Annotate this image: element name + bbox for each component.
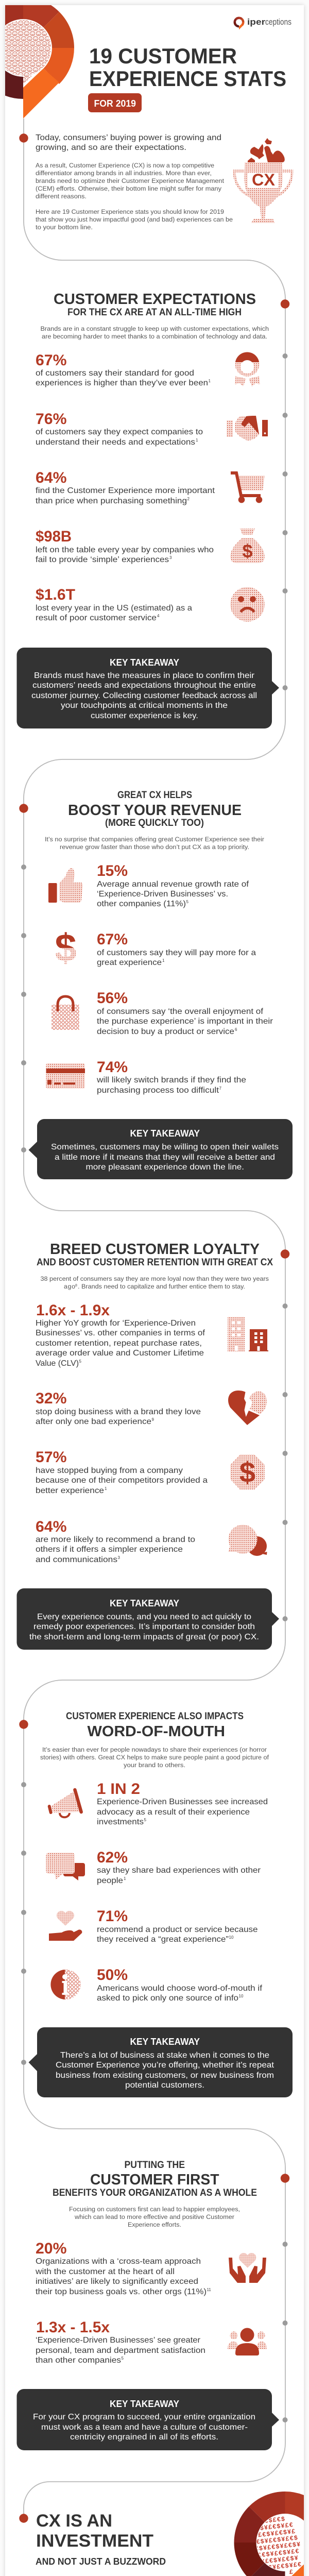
stat: 56% xyxy=(97,990,273,1036)
section intro text xyxy=(40,1746,269,1769)
stat: $1.6T: result of poor customer service xyxy=(36,614,157,622)
intro body text: Here are 19 Customer Experience stats you should know for 2019 xyxy=(36,208,224,215)
stat: 71%: they received a “great experience” xyxy=(97,1935,229,1944)
stat: 67% pay more: great experience xyxy=(97,958,162,967)
section intro text: revenue grow faster than those who don’t put CX as a top priority. xyxy=(60,843,249,851)
stat: $1.6T: lost every year in the US (estimated) as a xyxy=(36,604,192,613)
intro body text: different reasons. xyxy=(36,193,87,200)
heading: CUSTOMER EXPECTATIONS xyxy=(54,291,256,308)
callout: key takeaway: There’s a lot of business at stake when it comes to the xyxy=(60,2051,269,2060)
heading xyxy=(53,2160,257,2198)
callout: key takeaway: more pleasant experience down the line. xyxy=(85,1163,244,1172)
stat: 32%: 9 xyxy=(151,1417,154,1422)
stat: 57%: have stopped buying from a company xyxy=(36,1466,183,1475)
icon: octagon dollar xyxy=(230,1454,265,1489)
stat: 56%: decision to buy a product or service xyxy=(97,1027,234,1036)
section intro text: stories) with others. Great CX helps to make sure people paint a good picture of xyxy=(40,1754,269,1761)
stat: $98B: fail to provide ‘simple’ experiences xyxy=(36,555,169,564)
intro body text: As a result, Customer Experience (CX) is now a top competitive xyxy=(36,162,214,169)
stat: 64% price: than price when purchasing something xyxy=(36,497,187,505)
logo: iperceptions small xyxy=(234,17,291,30)
callout: key takeaway: the short-term and long-term impacts of great (or poor) CX. xyxy=(29,1633,259,1641)
stat: 71% xyxy=(97,1908,258,1944)
stat: 15%: ‘Experience-Driven Businesses’ vs. xyxy=(97,890,228,899)
stat: 32% xyxy=(36,1390,201,1426)
callout: key takeaway xyxy=(16,648,279,728)
stat: 74% xyxy=(96,1059,246,1095)
section intro text: your brand to others. xyxy=(124,1761,185,1769)
intro lead text: growing, and so are their expectations. xyxy=(36,143,186,152)
stat: 50%: 10 xyxy=(239,1994,244,1998)
stat: 32%: after only one bad experience xyxy=(36,1417,151,1426)
stat: 67% standards: 67% xyxy=(36,352,67,369)
stat: $98B xyxy=(36,528,214,564)
icon: dollar sign: $ xyxy=(55,926,77,970)
section intro text: which can lead to more effective and positive Customer xyxy=(74,2213,234,2221)
icon: location pin with currency symbols: ¥£€$¥£€$¥£ xyxy=(253,2528,296,2539)
stat: 1.6x - 1.9x: 1.6x - 1.9x xyxy=(36,1302,110,1319)
stat: 50% xyxy=(97,1967,263,2003)
callout: key takeaway: centricity engrained in all of its efforts. xyxy=(70,2433,218,2442)
stat: 20%: 11 xyxy=(207,2287,211,2292)
icon: money bag: $ xyxy=(242,540,253,562)
section intro text xyxy=(69,2206,240,2228)
heading: AND BOOST CUSTOMER RETENTION WITH GREAT CX xyxy=(37,1257,273,1268)
icon: shopping cart xyxy=(231,473,265,503)
section intro text: It’s no surprise that companies offering great Customer Experience see their xyxy=(45,836,264,843)
stat: 57% xyxy=(36,1449,208,1495)
icon: large location pin with smileys xyxy=(5,5,74,118)
stat: 67% standards xyxy=(36,352,211,387)
callout: key takeaway: KEY TAKEAWAY xyxy=(110,2399,179,2409)
heading: GREAT CX HELPS xyxy=(117,790,192,801)
stat: 67% standards: of customers say their standard for good xyxy=(36,369,194,378)
stat: 20%: initiatives’ are likely to significantly exceed xyxy=(36,2277,198,2286)
stat: 62%: say they share bad experiences with other xyxy=(97,1866,261,1875)
stat: 20% xyxy=(35,2240,211,2296)
icon: location pin with currency symbols: £€$¥£€$¥£€ xyxy=(260,2561,302,2572)
heading: FOR THE CX ARE AT AN ALL-TIME HIGH xyxy=(67,307,242,318)
icon: information circle xyxy=(50,1970,80,1999)
stat: 76% expectations: understand their needs and expectations xyxy=(36,438,195,447)
stat: 57%: because one of their competitors provided a xyxy=(36,1476,208,1485)
icon: speech bubbles xyxy=(228,1525,267,1556)
stat: 56%: the purchase experience’ is important in their xyxy=(97,1017,273,1026)
stat: $1.6T: 4 xyxy=(157,614,160,618)
stat: $98B: left on the table every year by companies who xyxy=(36,546,214,554)
icon: location pin with currency symbols: £ xyxy=(289,2568,293,2575)
stat: 15%: 15% xyxy=(97,862,128,879)
stat: 56%: of consumers say ‘the overall enjoyment of xyxy=(97,1007,264,1016)
callout: key takeaway: your touchpoints at critical moments in the xyxy=(61,701,228,710)
callout: key takeaway: KEY TAKEAWAY xyxy=(110,1598,179,1608)
icon: hands holding heart xyxy=(229,2253,266,2283)
callout: key takeaway: customer experience is key. xyxy=(91,711,198,720)
intro body text: to your bottom line. xyxy=(36,224,93,231)
section intro text xyxy=(40,1275,269,1290)
callout: key takeaway: a little more if it means that they will receive a better and xyxy=(55,1153,275,1162)
section intro text xyxy=(40,325,269,340)
intro body text: (CEM) efforts. Otherwise, their bottom line might suffer for many xyxy=(36,185,222,192)
stat: 67% pay more: 67% xyxy=(97,931,128,948)
callout: key takeaway: remedy poor experiences. It’s important to consider both xyxy=(33,1622,255,1631)
stat: 1 in 2 xyxy=(97,1781,268,1826)
icon: chat bubbles xyxy=(46,1853,85,1880)
stat: 20%: Organizations with a ‘cross-team approach xyxy=(36,2257,201,2266)
stat: 64% recommend: 64% xyxy=(36,1518,67,1535)
stat: 50%: Americans would choose word-of-mouth if xyxy=(97,1984,263,1993)
callout: key takeaway: For your CX program to succeed, your entire organization xyxy=(33,2413,255,2421)
heading: (MORE QUICKLY TOO) xyxy=(105,818,204,828)
stat: 15%: other companies (11%) xyxy=(97,900,186,908)
stat: 32%: 32% xyxy=(36,1390,67,1407)
section intro text: Experience efforts. xyxy=(128,2221,181,2228)
intro body text: differentiator among brands in all industries. More than ever, xyxy=(36,170,212,177)
panel: customer loyalty xyxy=(16,1241,279,1650)
panel: word of mouth xyxy=(29,1711,293,2097)
stat: 56%: 6 xyxy=(235,1027,237,1032)
section intro text: 38 percent of consumers say they are more loyal now than they were two years xyxy=(40,1275,269,1282)
stat: 62%: 1 xyxy=(124,1876,126,1881)
stat: 1 in 2: Experience-Driven Businesses see increased xyxy=(97,1798,268,1806)
intro body text: that show you just how impactful good (and bad) experiences can be xyxy=(36,216,233,223)
stat: 64% price: 64% xyxy=(36,469,67,486)
stat: 67% pay more: 1 xyxy=(162,958,165,963)
section intro text xyxy=(45,836,264,851)
panel: CX is an investment xyxy=(19,2492,309,2576)
stat: 64% recommend: others if it offers a simpler experience xyxy=(36,1545,183,1554)
intro body text: brands need to optimize their Customer Experience Management xyxy=(36,177,225,184)
stat: 64% price: find the Customer Experience more important xyxy=(36,486,215,495)
stat: 67% standards: experiences is higher than they’ve ever been xyxy=(36,379,208,387)
callout: key takeaway: Sometimes, customers may be willing to open their wallets xyxy=(51,1143,279,1151)
callout: key takeaway: Customer Experience you’re offering, whether it’s repeat xyxy=(56,2061,274,2070)
stat: 1.6x - 1.9x: Higher YoY growth for ‘Experience-Driven xyxy=(36,1319,196,1328)
stat: 1.6x - 1.9x xyxy=(36,1302,205,1368)
logo: iperceptions small: ceptions xyxy=(265,17,291,27)
panel: customer expectations xyxy=(16,291,279,728)
stat: 64% recommend: and communications xyxy=(36,1555,117,1564)
callout: key takeaway xyxy=(29,1119,293,1179)
stat: $98B: 3 xyxy=(169,555,172,560)
icon: shopping bag xyxy=(52,996,79,1030)
icon: handshake xyxy=(227,416,268,440)
stat: 20%: their top business goals vs. other orgs (11%) xyxy=(36,2287,207,2296)
icon: location pin with currency symbols: ¥£€$¥£€$¥£€ xyxy=(253,2547,300,2559)
stat: $1.6T: $1.6T xyxy=(36,586,75,603)
section intro text: ago xyxy=(64,1283,75,1290)
title: EXPERIENCE STATS xyxy=(89,66,286,91)
stat: 71%: recommend a product or service because xyxy=(97,1925,258,1934)
icon: location pin with currency symbols xyxy=(234,2492,309,2576)
icon: location pin with currency symbols: £€$¥£€$¥£€$ xyxy=(252,2534,299,2546)
intro lead text xyxy=(36,133,221,152)
stat: 64% recommend xyxy=(36,1518,195,1564)
stat: 74%: purchasing process too difficult xyxy=(97,1086,219,1095)
panel: customer first xyxy=(16,2160,279,2450)
icon: hand holding heart xyxy=(49,1911,82,1941)
stat: 62%: people xyxy=(97,1876,123,1885)
callout: key takeaway: business from existing customers, or new business from xyxy=(56,2071,274,2080)
icon: location pin with currency symbols: €$¥£€$¥£€$¥ xyxy=(254,2540,301,2552)
stat: 1.3x - 1.5x: 1.3x - 1.5x xyxy=(36,2319,110,2336)
icon: office buildings xyxy=(228,1317,268,1351)
stat: 1.3x - 1.5x: than other companies xyxy=(36,2356,121,2365)
section intro text: It’s easier than ever for people nowadays to share their experiences (or horror xyxy=(42,1746,267,1753)
stat: 76% expectations: of customers say they expect companies to xyxy=(36,428,203,436)
section intro text: Focusing on customers first can lead to happier employees, xyxy=(69,2206,240,2213)
stat: 64% recommend: are more likely to recommend a brand to xyxy=(36,1535,195,1544)
heading: WORD-OF-MOUTH xyxy=(88,1723,225,1740)
stat: 57%: 1 xyxy=(105,1486,107,1491)
stat: 1.3x - 1.5x: ‘Experience-Driven Businesses’ see greater xyxy=(36,2336,200,2345)
stat: 20%: with the customer at the heart of all xyxy=(35,2267,175,2276)
stat: 15%: 5 xyxy=(186,900,188,904)
stat: 76% expectations: 1 xyxy=(196,438,198,443)
stat: 1 in 2: investments xyxy=(97,1818,144,1826)
callout: key takeaway xyxy=(29,2027,293,2097)
stat: 71%: 71% xyxy=(97,1908,128,1925)
heading xyxy=(68,790,242,828)
stat: 1.6x - 1.9x: 5 xyxy=(79,1359,81,1364)
stat: 32%: stop doing business with a brand they love xyxy=(36,1408,201,1416)
heading: BENEFITS YOUR ORGANIZATION AS A WHOLE xyxy=(53,2188,257,2198)
stat: 64% price: 2 xyxy=(187,497,190,501)
stat: 76% expectations: 76% xyxy=(36,411,67,428)
icon: money bag xyxy=(230,529,265,563)
icon: octagon dollar: $ xyxy=(239,1456,255,1488)
icon: team of people xyxy=(228,2328,267,2355)
callout: key takeaway: customers’ needs and expectations throughout the entire xyxy=(32,681,256,690)
stat: 20%: 20% xyxy=(36,2240,67,2257)
stat: 1 in 2: 5 xyxy=(144,1818,146,1822)
icon: megaphone xyxy=(49,1790,81,1817)
icon: sad face xyxy=(230,587,265,621)
stat: 64% recommend: 3 xyxy=(117,1555,121,1560)
stat: 1.3x - 1.5x xyxy=(36,2319,205,2365)
callout: key takeaway xyxy=(16,1588,279,1650)
stat: 1.6x - 1.9x: customer retention, repeat purchase rates, xyxy=(36,1339,202,1348)
stat: 57%: better experience xyxy=(36,1486,104,1495)
icon: CX trophy with thumbs up: CX xyxy=(252,171,276,189)
intro body text xyxy=(36,162,233,231)
callout: key takeaway: customer journey. Collecting customer feedback across all xyxy=(31,691,257,700)
heading: PUTTING THE xyxy=(125,2160,185,2171)
callout: key takeaway xyxy=(16,2389,279,2450)
stat: 57%: 57% xyxy=(36,1449,67,1466)
panel: boost your revenue xyxy=(29,790,293,1179)
icon: dollar sign: $ xyxy=(55,926,77,970)
stat: 71%: 10 xyxy=(229,1935,234,1940)
section intro text: Brands are in a constant struggle to keep up with customer expectations, which xyxy=(40,325,269,332)
stat: $98B: $98B xyxy=(36,528,72,545)
stat: 74%: 7 xyxy=(219,1086,221,1091)
logo: iperceptions small: iper xyxy=(247,17,265,27)
heading: INVESTMENT xyxy=(36,2531,153,2551)
heading xyxy=(36,2511,166,2567)
heading: CUSTOMER EXPERIENCE ALSO IMPACTS xyxy=(66,1711,244,1722)
callout: key takeaway: KEY TAKEAWAY xyxy=(130,1128,200,1139)
title: 19 CUSTOMER xyxy=(89,44,237,68)
icon: dollar sign xyxy=(56,932,76,964)
section intro text: 8 xyxy=(75,1284,77,1287)
heading xyxy=(66,1711,244,1740)
heading xyxy=(37,1241,273,1268)
icon: credit card xyxy=(46,1063,85,1089)
stat: 76% expectations xyxy=(36,411,203,447)
panel: header xyxy=(0,0,292,231)
heading: CX IS AN xyxy=(36,2511,112,2531)
intro lead text: Today, consumers’ buying power is growing and xyxy=(36,133,221,142)
callout: key takeaway: potential customers. xyxy=(125,2081,204,2090)
stat: 67% pay more: of customers say they will pay more for a xyxy=(97,948,256,957)
stat: 1.3x - 1.5x: personal, team and department satisfaction xyxy=(36,2346,205,2355)
callout: key takeaway: must work as a team and have a culture of customer- xyxy=(41,2423,248,2432)
heading: CUSTOMER FIRST xyxy=(90,2172,219,2188)
section intro text: . Brands need to capitalize and further entice them to stay. xyxy=(78,1283,245,1290)
icon: thumbs up xyxy=(48,868,83,903)
stat: 67% pay more xyxy=(97,931,256,967)
icon: rosette xyxy=(235,352,260,386)
stat: 1.3x - 1.5x: 5 xyxy=(122,2356,124,2361)
icon: location pin with currency symbols: €$¥£€$¥£€ xyxy=(255,2521,294,2532)
stat: 62% xyxy=(97,1849,261,1885)
icon: location pin with currency symbols: $¥£€$¥£€$¥ xyxy=(256,2554,299,2566)
stat: 1.6x - 1.9x: Businesses’ vs. other companies in terms of xyxy=(36,1329,205,1337)
stat: 64% price xyxy=(36,469,215,505)
stat: 1.6x - 1.9x: Value (CLV) xyxy=(36,1359,79,1368)
stat: 67% standards: 1 xyxy=(208,379,211,383)
callout: key takeaway: Every experience counts, and you need to act quickly to xyxy=(37,1613,251,1621)
heading: BOOST YOUR REVENUE xyxy=(68,802,242,819)
heading xyxy=(54,291,256,318)
stat: 74%: 74% xyxy=(97,1059,128,1076)
badge: for 2019: FOR 2019 xyxy=(94,98,136,109)
callout: key takeaway: Brands must have the measures in place to confirm their xyxy=(34,671,254,680)
stat: 1 in 2: advocacy as a result of their experience xyxy=(97,1808,250,1817)
heading: BREED CUSTOMER LOYALTY xyxy=(50,1241,260,1258)
stat: 50%: asked to pick only one source of info xyxy=(97,1994,238,2003)
stat: $1.6T xyxy=(36,586,192,622)
icon: location pin with currency symbols: £€$£€$ xyxy=(260,2515,286,2525)
callout: key takeaway: KEY TAKEAWAY xyxy=(130,2037,200,2047)
stat: 62%: 62% xyxy=(97,1849,128,1866)
badge: for 2019 xyxy=(88,93,142,112)
stat: 1.6x - 1.9x: average order value and Customer Lifetime xyxy=(36,1349,204,1358)
icon: CX trophy with thumbs up xyxy=(234,138,292,223)
callout: key takeaway: KEY TAKEAWAY xyxy=(110,657,179,668)
stat: 74%: will likely switch brands if they find the xyxy=(96,1076,246,1084)
stat: 1 in 2: 1 IN 2 xyxy=(97,1781,140,1798)
heading: AND NOT JUST A BUZZWORD xyxy=(36,2556,166,2567)
icon: broken heart xyxy=(228,1391,267,1425)
stat: 56%: 56% xyxy=(97,990,128,1007)
stat: 15%: Average annual revenue growth rate of xyxy=(97,880,249,889)
section intro text: are becoming harder to meet thanks to a combination of technology and data. xyxy=(42,333,267,340)
stat: 15% xyxy=(97,862,249,908)
stat: 50%: 50% xyxy=(97,1967,128,1984)
title xyxy=(89,44,286,91)
